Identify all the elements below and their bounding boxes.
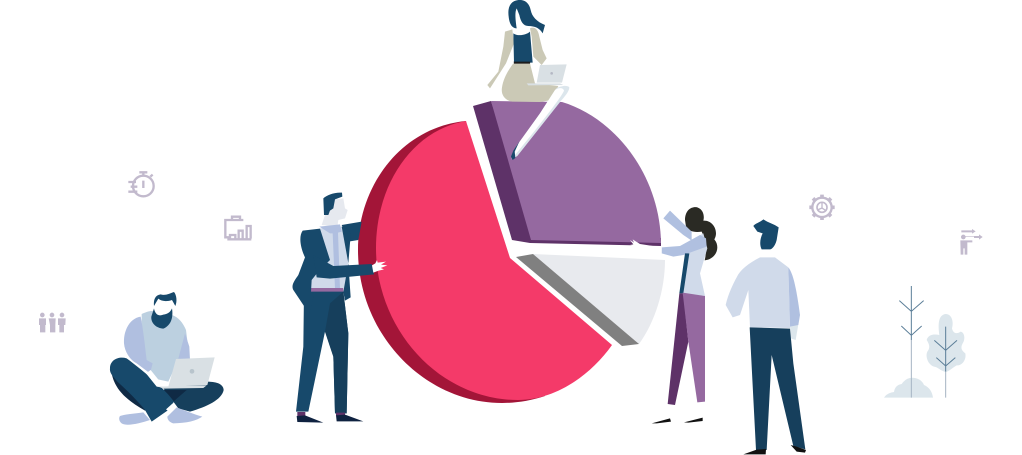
front leg <box>110 358 174 422</box>
raised arm <box>663 211 692 241</box>
figure: woman holding the pie <box>630 207 717 423</box>
hand <box>630 239 662 253</box>
shoes <box>743 445 806 454</box>
hair <box>154 292 176 306</box>
shoe <box>511 142 519 160</box>
belt <box>311 288 343 292</box>
figure: man standing seen from behind <box>726 219 806 454</box>
tree stems <box>899 286 957 398</box>
back leg <box>163 382 224 412</box>
shirt <box>726 257 790 328</box>
shadow under leg <box>112 373 187 411</box>
icon: three people <box>39 313 66 332</box>
hair and neck <box>753 219 779 249</box>
raised arm <box>342 222 362 242</box>
navy top <box>513 32 533 63</box>
trousers <box>668 293 688 405</box>
jacket <box>293 227 351 313</box>
laptop <box>158 357 215 389</box>
icon: gear with pie chart <box>809 195 835 220</box>
laptop logo <box>190 369 194 374</box>
pie slice: red large slice <box>358 121 612 403</box>
shoes <box>297 415 363 423</box>
hair <box>508 0 545 33</box>
socks <box>297 412 345 416</box>
belt <box>514 62 530 64</box>
trousers <box>750 327 805 450</box>
laptop <box>527 64 567 85</box>
pie slice: purple slice <box>473 101 661 246</box>
icon: briefcase with bar chart <box>225 217 251 239</box>
jacket and skirt <box>487 28 558 102</box>
face <box>155 302 173 317</box>
ankle <box>166 403 178 413</box>
extended arm <box>313 255 374 279</box>
shirt <box>311 227 348 288</box>
pie slice: grey slice <box>516 254 665 346</box>
trousers <box>296 292 348 413</box>
figure: man sitting with laptop <box>110 292 224 425</box>
hair <box>323 193 342 215</box>
navy strip <box>679 253 689 293</box>
hair <box>685 207 717 260</box>
shoes <box>119 407 202 425</box>
leg <box>512 86 569 159</box>
hand <box>790 324 798 340</box>
tie <box>319 224 342 288</box>
pie chart <box>358 101 665 403</box>
laptop logo <box>550 72 553 75</box>
face and neck <box>322 198 348 227</box>
plants <box>884 286 966 398</box>
sleeve <box>788 267 800 327</box>
shoes <box>652 418 703 423</box>
beard <box>151 308 172 329</box>
front arm <box>662 235 707 257</box>
sleeves <box>124 317 190 373</box>
blouse <box>683 233 707 296</box>
hand <box>146 370 170 388</box>
bush <box>884 378 933 398</box>
hand <box>372 260 387 273</box>
icon: stopwatch <box>128 172 154 196</box>
figure: woman sitting on the pie with laptop <box>487 0 569 160</box>
leaf tree crown <box>927 314 966 372</box>
sweater <box>142 311 189 382</box>
icon: person with arrows <box>960 229 983 255</box>
figure: man in suit pushing the pie <box>293 193 387 423</box>
